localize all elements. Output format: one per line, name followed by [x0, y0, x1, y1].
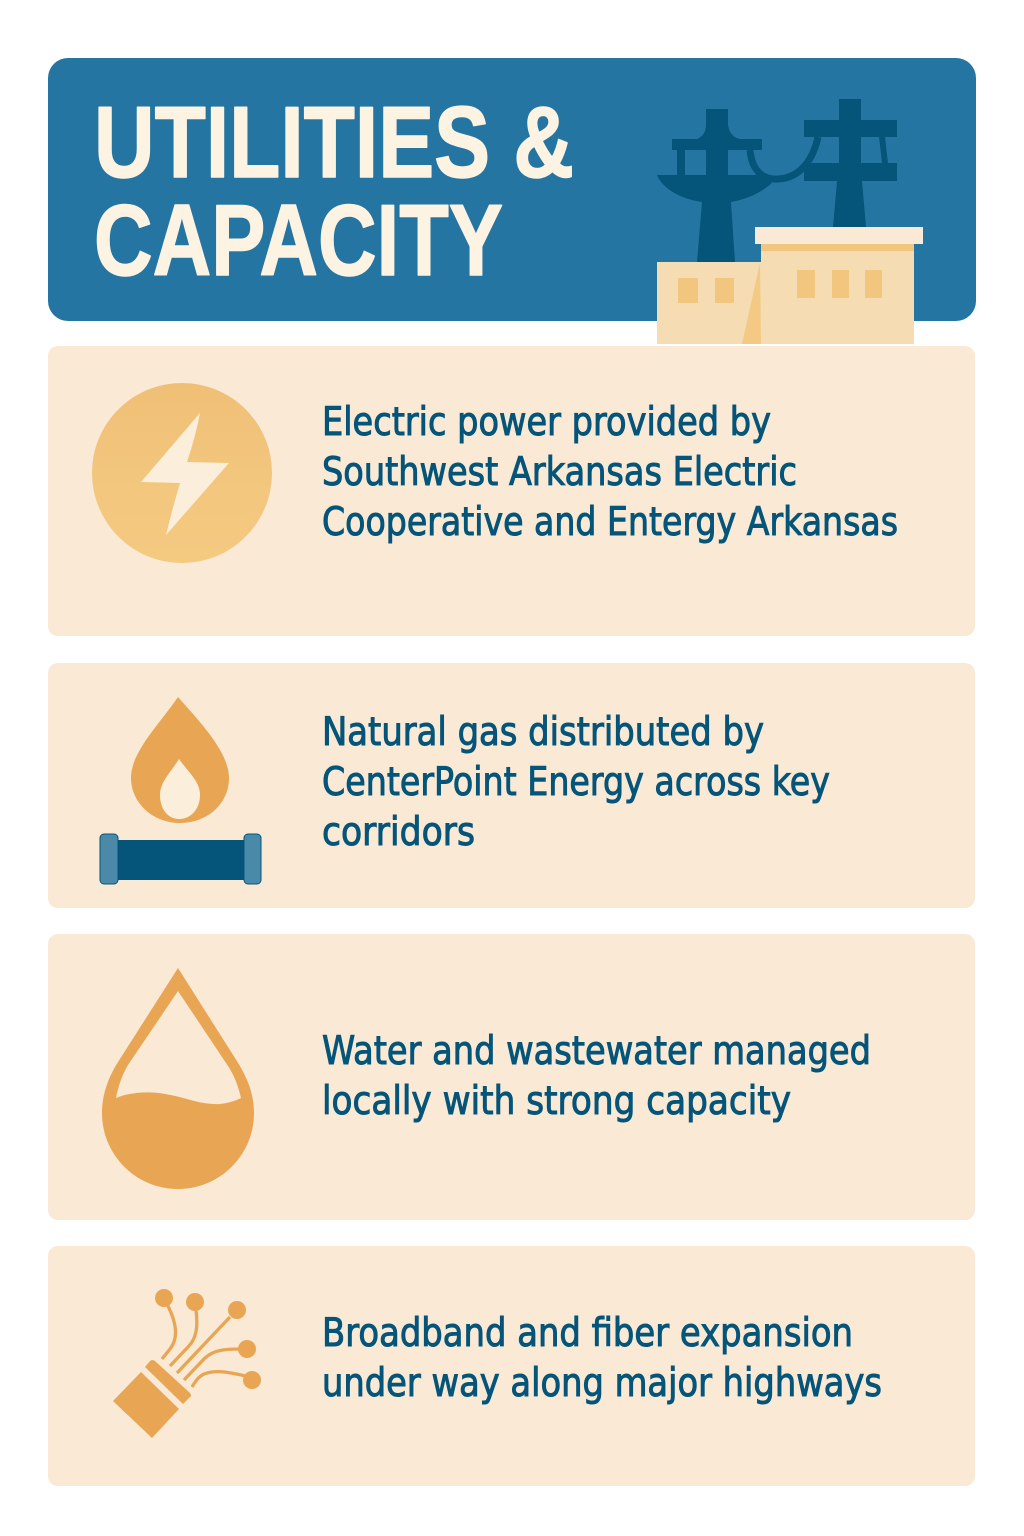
text: broadband: under way along major highways: [322, 1361, 882, 1406]
icon: power pylons and buildings: [657, 99, 923, 344]
panel: broadband: [48, 1246, 975, 1486]
header banner: [48, 58, 976, 344]
panel: water: [48, 934, 975, 1220]
icon: lightning bolt: [92, 383, 272, 563]
text: natural gas: CenterPoint Energy across key: [322, 760, 830, 805]
title: CAPACITY: [94, 185, 503, 297]
text: natural gas: [322, 710, 830, 855]
panel: electric power: [48, 346, 975, 636]
title: [94, 87, 574, 297]
text: electric power: Electric power provided by: [322, 400, 771, 445]
text: water: [322, 1029, 871, 1124]
panel: natural gas: [48, 663, 975, 908]
text: natural gas: Natural gas distributed by: [322, 710, 764, 755]
text: broadband: Broadband and fiber expansion: [322, 1311, 853, 1356]
text: water: Water and wastewater managed: [322, 1029, 871, 1074]
text: natural gas: corridors: [322, 810, 475, 855]
text: electric power: [322, 400, 898, 545]
title: UTILITIES &: [94, 87, 574, 199]
icon: fiber optic cable: [113, 1289, 261, 1438]
icon: water drop: [102, 968, 254, 1189]
text: electric power: Southwest Arkansas Electric: [322, 450, 797, 495]
text: broadband: [322, 1311, 882, 1406]
icon: gas flame and pipe: [100, 697, 261, 884]
text: water: locally with strong capacity: [322, 1079, 791, 1124]
text: electric power: Cooperative and Entergy Arkansas: [322, 500, 898, 545]
